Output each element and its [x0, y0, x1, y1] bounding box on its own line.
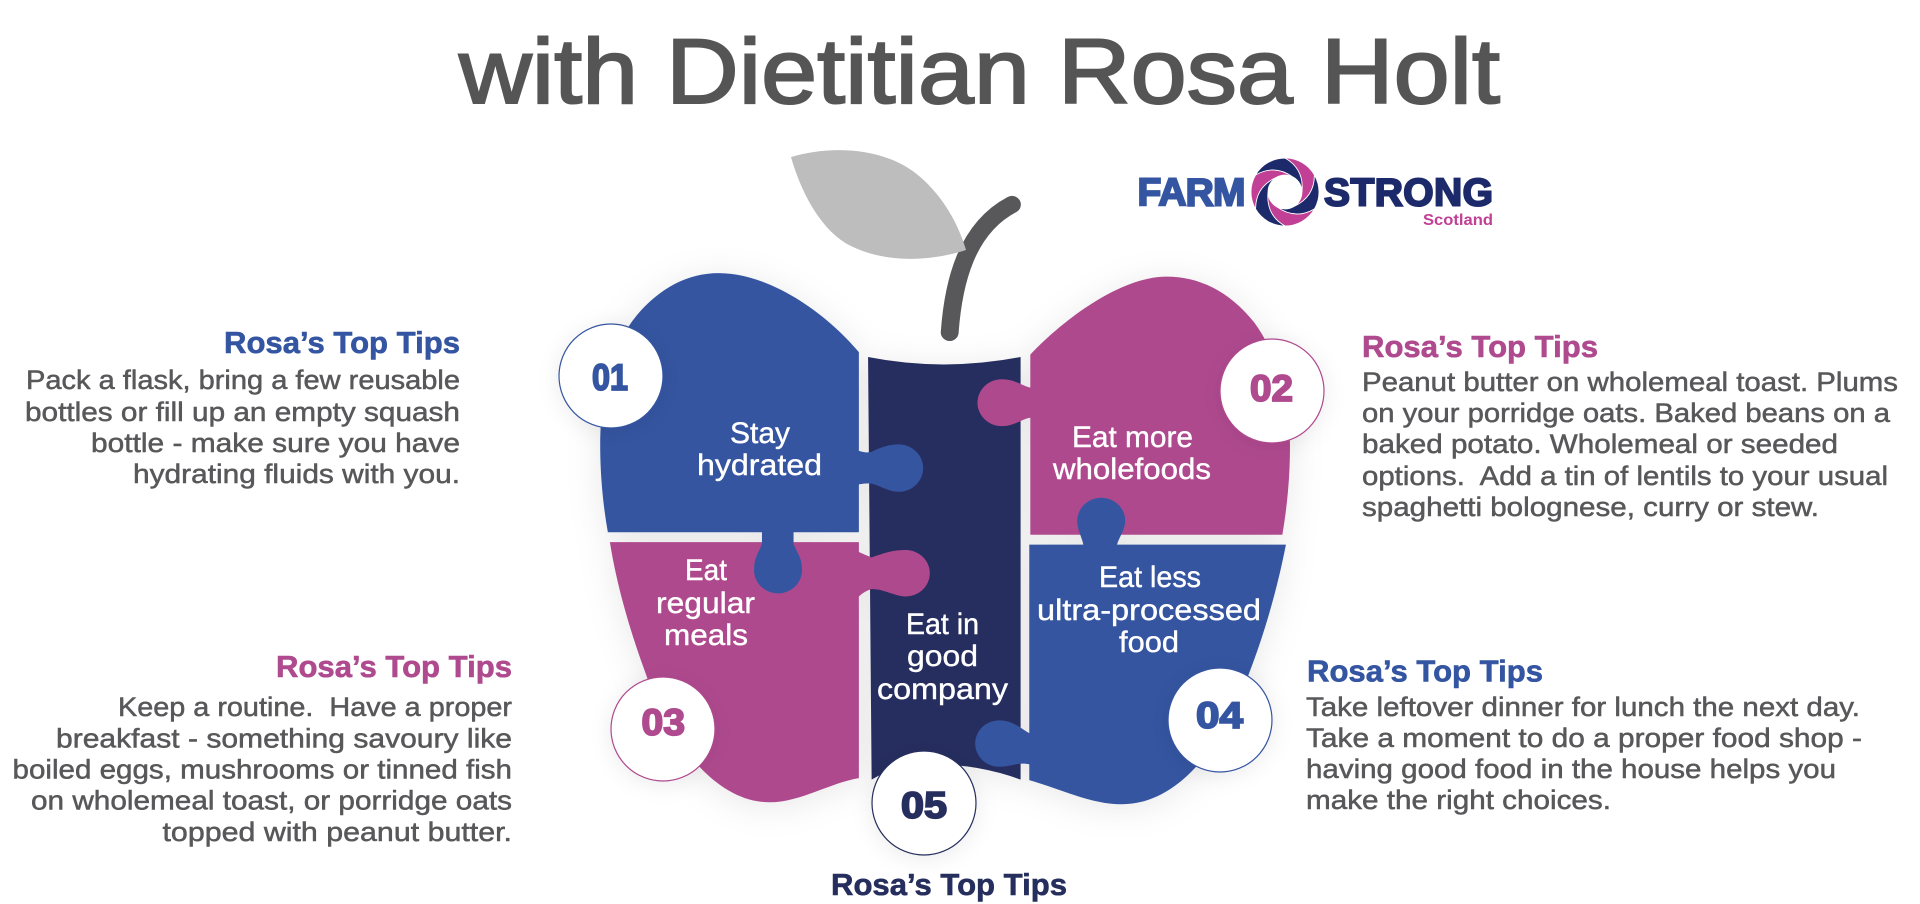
body text: bottles or fill up an empty squash: [25, 397, 460, 427]
body text: boiled eggs, mushrooms or tinned fish: [12, 754, 512, 784]
badge 05: [872, 751, 976, 855]
label: eat in good company: [877, 608, 1008, 706]
apple puzzle pieces: [600, 273, 1290, 804]
badge 05: 05: [901, 785, 947, 826]
panel labels: [656, 417, 1261, 706]
body text: [25, 365, 460, 489]
logo word Scotland: Scotland: [1423, 212, 1493, 229]
badge 02: 02: [1250, 368, 1293, 409]
heading: Rosa’s Top Tips: [1307, 654, 1543, 688]
body text: bottle - make sure you have: [91, 428, 460, 458]
body text: on wholemeal toast, or porridge oats: [31, 786, 512, 816]
body text: breakfast - something savoury like: [56, 724, 512, 754]
heading: Rosa’s Top Tips: [224, 325, 460, 360]
badge 03: [611, 677, 715, 781]
tips heading: eat in good company: Rosa’s Top Tips: [831, 867, 1067, 902]
panel: eat regular meals: [610, 542, 930, 802]
icon: leaf: [791, 150, 966, 259]
body text: Peanut butter on wholemeal toast. Plums: [1362, 367, 1898, 397]
badge 04: [1168, 668, 1272, 772]
body text: topped with peanut butter.: [162, 817, 512, 847]
body text: Keep a routine. Have a proper: [118, 692, 512, 722]
body text: Take a moment to do a proper food shop -: [1306, 723, 1862, 753]
body text: baked potato. Wholemeal or seeded: [1362, 429, 1838, 459]
label: eat more wholefoods: wholefoods: [1052, 453, 1211, 486]
label: eat less ultra-processed food: [1037, 561, 1261, 659]
body text: [1306, 692, 1862, 815]
panel: stay hydrated: [600, 273, 923, 593]
logo word FARM: FARM: [1138, 172, 1246, 214]
label: eat in good company: good: [907, 640, 978, 673]
badge 02: [1220, 339, 1324, 443]
apple graphic: [600, 150, 1290, 804]
badge 01: 01: [592, 357, 628, 398]
tips: stay hydrated: [25, 325, 460, 489]
label: stay hydrated: [697, 417, 822, 482]
body text: Pack a flask, bring a few reusable: [26, 365, 460, 395]
body text: having good food in the house helps you: [1306, 754, 1836, 784]
body text: hydrating fluids with you.: [133, 459, 460, 489]
body text: Take leftover dinner for lunch the next day.: [1306, 692, 1860, 722]
label: eat less ultra-processed food: Eat less: [1099, 561, 1201, 594]
panel: eat in good company: [868, 357, 1021, 780]
number badges: [559, 324, 1324, 855]
title: with Dietitian Rosa Holt: [458, 21, 1500, 123]
body text: [1362, 367, 1898, 522]
label: eat more wholefoods: Eat more: [1072, 421, 1193, 454]
heading: Rosa’s Top Tips: [1362, 329, 1598, 364]
label: eat less ultra-processed food: ultra-processed: [1037, 594, 1261, 627]
label: eat in good company: company: [877, 673, 1008, 706]
body text: options. Add a tin of lentils to your usual: [1362, 461, 1888, 491]
tips: eat more wholefoods: [1362, 329, 1898, 522]
heading: Rosa’s Top Tips: [276, 649, 512, 684]
badge 04: 04: [1196, 695, 1243, 736]
label: eat more wholefoods: [1052, 421, 1211, 486]
badge 03: 03: [642, 702, 685, 743]
label: eat less ultra-processed food: food: [1119, 626, 1179, 659]
label: stay hydrated: Stay: [730, 417, 790, 450]
label: eat regular meals: [656, 554, 755, 652]
panel: eat more wholefoods: [977, 277, 1290, 535]
logo word STRONG: STRONG: [1324, 172, 1493, 214]
body text: make the right choices.: [1306, 785, 1611, 815]
label: eat regular meals: Eat: [685, 554, 727, 587]
icon: stem: [950, 205, 1012, 332]
label: eat regular meals: regular: [656, 587, 755, 620]
logo: Farmstrong Scotland: [1138, 150, 1493, 234]
tips: eat regular meals: [12, 649, 512, 847]
logo ring: [1241, 150, 1329, 234]
label: eat regular meals: meals: [664, 619, 748, 652]
badge 01: [559, 324, 663, 428]
panel: eat less ultra-processed food: [975, 498, 1286, 804]
label: stay hydrated: hydrated: [697, 449, 822, 482]
tips: eat less ultra-processed food: [1306, 654, 1862, 815]
body text: [12, 692, 512, 847]
label: eat in good company: Eat in: [906, 608, 979, 641]
body text: on your porridge oats. Baked beans on a: [1362, 398, 1890, 428]
body text: spaghetti bolognese, curry or stew.: [1362, 492, 1819, 522]
